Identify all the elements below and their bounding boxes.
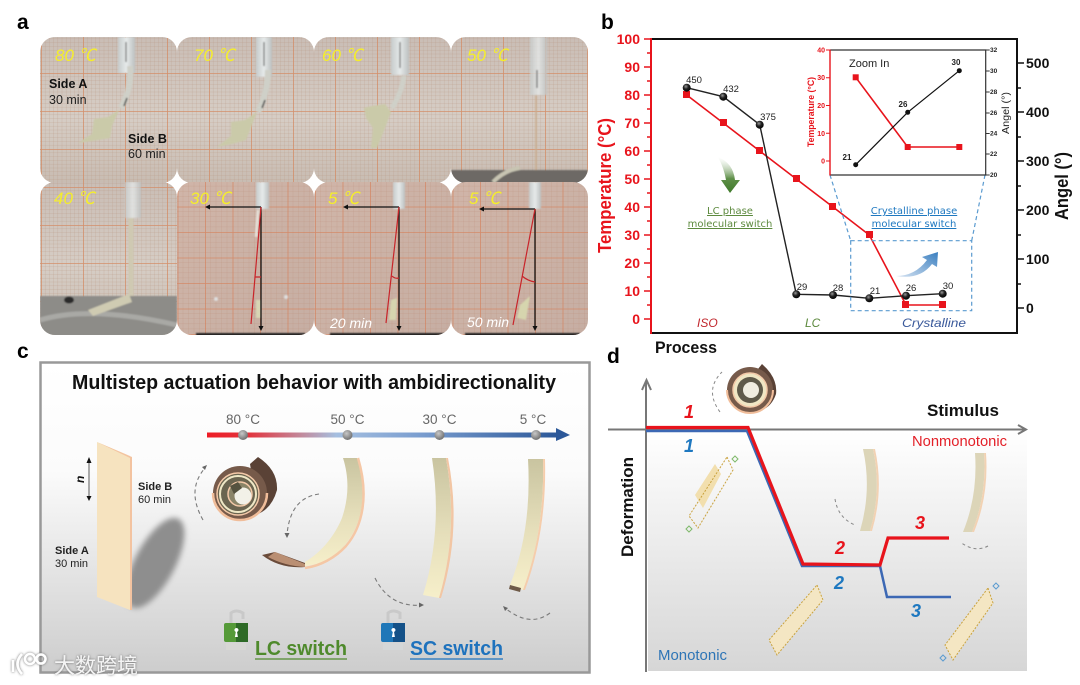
phase labels: LC [805, 316, 821, 330]
film at 5 C [509, 459, 545, 592]
label a: a [17, 11, 29, 34]
nonmonotonic red curve [646, 428, 949, 565]
angle series: 26 [906, 283, 916, 294]
inset chart: 20 [990, 172, 998, 179]
photo 60 C: 60 ℃ [322, 46, 365, 65]
inset chart: 20 [817, 103, 825, 110]
monotonic blue curve [646, 431, 951, 597]
step numbers: 3 [915, 513, 925, 533]
photo 5 C, 20 min: 20 min [329, 315, 372, 331]
photo 50 C [451, 37, 588, 184]
angle series: 21 [870, 286, 880, 297]
photo 70 C [177, 37, 314, 183]
inset chart: Temperature (°C) [806, 77, 816, 147]
photo 80 C: 80 ℃ [55, 46, 98, 65]
rotation arrow [712, 372, 722, 412]
director n arrow: n [73, 476, 87, 483]
inset chart: 10 [817, 131, 825, 138]
photo 70 C: 70 ℃ [194, 46, 237, 65]
title: Multistep actuation behavior with ambidirectionality [72, 372, 557, 394]
LC switch lock [224, 611, 248, 650]
left temperature axis: 80 [624, 87, 640, 103]
watermark text: 大数跨境 [54, 650, 138, 680]
label b: b [601, 11, 614, 34]
LC phase label: molecular switch [688, 219, 772, 230]
side labels: Side B [138, 481, 172, 493]
inset chart: 0 [821, 158, 825, 166]
left temperature axis: 30 [624, 227, 640, 243]
side labels [55, 481, 172, 570]
phase labels: Crystalline [902, 316, 966, 330]
LC phase label: LC phase [707, 206, 753, 217]
label c: c [17, 340, 29, 363]
photo 50 C: 50 ℃ [467, 46, 510, 65]
crystalline phase label: Crystalline phase [871, 206, 957, 217]
arrowheads [202, 465, 508, 611]
crystalline phase label: molecular switch [872, 219, 956, 230]
film at 30 C [423, 458, 454, 598]
side labels: 60 min [138, 494, 171, 506]
step numbers: 2 [834, 538, 845, 558]
angle series: 450 [686, 75, 702, 86]
photo 80 C: 30 min [49, 93, 87, 107]
angle series: 432 [723, 84, 739, 95]
side labels: 30 min [55, 558, 88, 570]
step numbers: 2 [833, 573, 844, 593]
side labels: Side A [55, 545, 89, 557]
photo 30 C [177, 182, 314, 336]
zoom region box and connectors [830, 175, 985, 311]
temperature arrow [207, 412, 570, 441]
crystalline phase label [871, 206, 957, 230]
inset chart: 22 [990, 151, 998, 158]
panel c: multistep actuation [17, 340, 590, 672]
temperature arrow: 30 °C [423, 412, 457, 427]
right angle axis [1017, 55, 1072, 316]
LC phase label [688, 206, 772, 230]
left temperature axis: 40 [624, 199, 640, 215]
inset chart: Angel (°) [1001, 92, 1012, 134]
x axis title: Process [655, 339, 717, 357]
axes [608, 380, 1026, 672]
inset chart: 30 [817, 75, 825, 82]
right angle axis: 200 [1026, 202, 1050, 218]
phase labels: ISO [697, 316, 718, 330]
photo 80 C [40, 37, 177, 183]
film step 2 nonmonotonic [860, 449, 879, 531]
coil icon [727, 364, 776, 413]
icon: blue arrow [896, 252, 938, 277]
angle series [683, 75, 953, 302]
step numbers [684, 402, 925, 621]
inset chart [806, 47, 1012, 179]
inset chart: 26 [990, 110, 998, 117]
gradient background [648, 431, 1027, 671]
temperature arrow: 5 °C [520, 412, 546, 427]
left temperature axis: 100 [617, 31, 640, 47]
left temperature axis: 20 [624, 255, 640, 271]
inset chart: 32 [990, 47, 998, 54]
left temperature axis: 0 [632, 311, 640, 327]
left temperature axis [595, 31, 651, 327]
SC switch label: SC switch [410, 638, 503, 660]
temperature series [683, 91, 946, 308]
icon: green arrow [718, 157, 740, 193]
phase labels [697, 316, 966, 330]
Deformation label: Deformation [618, 457, 637, 557]
right angle axis: 100 [1026, 251, 1050, 267]
photo 40 C: 40 ℃ [54, 189, 97, 208]
left temperature axis: 10 [624, 283, 640, 299]
step numbers: 1 [684, 402, 694, 422]
Nonmonotonic label: Nonmonotonic [912, 433, 1007, 450]
photo 80 C: Side A [49, 77, 87, 91]
rotation arrows [195, 468, 550, 619]
photo 80 C: 60 min [128, 147, 166, 161]
inset chart: 24 [990, 130, 998, 138]
left temperature axis: 70 [624, 115, 640, 131]
photo 80 C: Side B [128, 132, 167, 146]
inset chart: 30 [990, 68, 998, 75]
coil at 80 C [213, 457, 277, 520]
photo 30 C: 30 ℃ [190, 189, 233, 208]
inset chart: 21 [843, 153, 852, 162]
schematic film 3 [940, 583, 999, 661]
photo 5 C, 20 min [314, 182, 451, 336]
inset chart: Zoom In [849, 58, 889, 70]
Monotonic label: Monotonic [658, 647, 727, 664]
step numbers: 3 [911, 601, 921, 621]
film at 50 C [262, 458, 364, 568]
SC switch lock [381, 611, 405, 650]
photo 5 C, 50 min [451, 182, 588, 336]
panel d: stimulus deformation plot [607, 345, 1027, 672]
label d: d [607, 345, 620, 368]
director n arrow [73, 457, 92, 501]
panel b: temperature and angle chart [595, 11, 1072, 357]
right angle axis: 400 [1026, 104, 1050, 120]
temperature arrow: 50 °C [331, 412, 365, 427]
angle series: 28 [833, 283, 843, 294]
schematic film 1 [686, 456, 738, 532]
watermark [13, 650, 138, 680]
left temperature axis: 50 [624, 171, 640, 187]
inset chart: 28 [990, 89, 998, 96]
step numbers: 1 [684, 436, 694, 456]
angle series: 375 [760, 112, 776, 123]
rotation arrows [835, 499, 988, 549]
panel a: photo series [17, 11, 588, 336]
gradient frame [40, 362, 590, 672]
angle series: 30 [943, 281, 953, 292]
inset chart: 30 [952, 58, 961, 67]
left temperature axis: 90 [624, 59, 640, 75]
photo 5 C, 50 min: 5 ℃ [469, 189, 502, 208]
photo 5 C, 50 min: 50 min [467, 314, 509, 330]
inset chart: 40 [817, 48, 825, 54]
temperature arrow: 80 °C [226, 412, 260, 427]
plot frame [651, 38, 1017, 334]
photo 40 C [40, 182, 177, 336]
watermark logo [13, 654, 46, 674]
right angle axis: 300 [1026, 153, 1050, 169]
flat film with shadow [97, 442, 196, 617]
angle series: 29 [797, 282, 807, 293]
inset chart: 26 [899, 100, 908, 109]
film step 3 nonmonotonic [963, 453, 986, 532]
right angle axis: Angel (°) [1052, 152, 1072, 220]
schematic film 2 [769, 585, 823, 655]
photo 5 C, 20 min: 5 ℃ [328, 189, 361, 208]
left temperature axis: 60 [624, 143, 640, 159]
left temperature axis: Temperature (°C) [595, 118, 615, 253]
Stimulus label: Stimulus [927, 401, 999, 420]
right angle axis: 500 [1026, 55, 1050, 71]
right angle axis: 0 [1026, 300, 1034, 316]
LC switch label: LC switch [255, 638, 347, 660]
photo 60 C [314, 37, 451, 183]
